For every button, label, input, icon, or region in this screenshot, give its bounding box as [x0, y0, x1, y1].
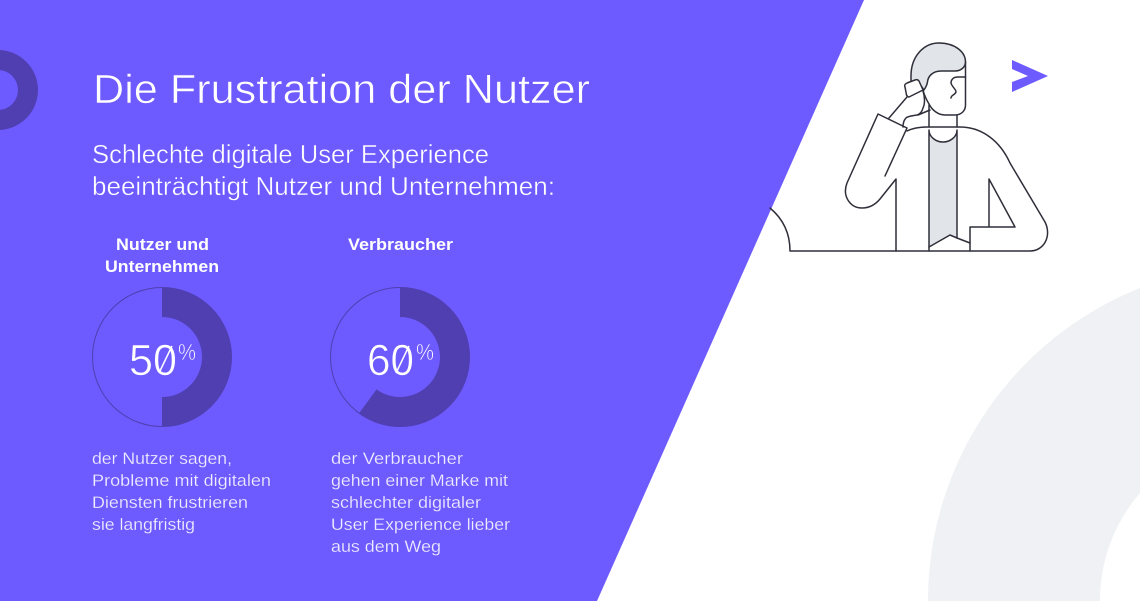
heading: Nutzer und Unternehmen: Nutzer und — [116, 235, 209, 254]
description: 60%: aus dem Weg — [331, 537, 441, 556]
subtitle: Schlechte digitale User Experience — [92, 139, 489, 169]
description: 60%: gehen einer Marke mit — [331, 471, 508, 490]
donut chart: 60% — [330, 288, 470, 426]
heading: Nutzer und Unternehmen: Unternehmen — [105, 257, 219, 276]
donut chart: 50%: 50 — [129, 336, 177, 385]
description: 60% — [331, 449, 510, 556]
face — [923, 62, 966, 115]
nose — [951, 77, 966, 98]
column: Nutzer und Unternehmen — [92, 235, 271, 534]
description: 60%: schlechter digitaler — [331, 493, 481, 512]
body outline — [770, 127, 1048, 251]
description: 50%: der Nutzer sagen, — [92, 449, 232, 468]
subtitle — [92, 139, 555, 201]
donut chart: 50%: % — [178, 339, 196, 365]
description: 50%: Probleme mit digitalen — [92, 471, 271, 490]
hair — [911, 43, 966, 90]
tie panel — [929, 130, 957, 247]
background arc: grey quarter ring — [928, 288, 1140, 601]
description: 60%: User Experience lieber — [331, 515, 510, 534]
purple angled panel — [0, 0, 864, 601]
illustration: thinking man — [770, 43, 1048, 251]
shirt lower lines — [929, 238, 970, 251]
icon: arrow logo — [1012, 60, 1048, 92]
title: Die Frustration der Nutzer — [93, 66, 590, 112]
heading: Nutzer und Unternehmen — [105, 235, 219, 276]
decorative ring at left edge — [0, 50, 38, 130]
description: 60%: der Verbraucher — [331, 449, 463, 468]
heading: Verbraucher: Verbraucher — [348, 235, 453, 254]
column: Verbraucher — [330, 235, 510, 556]
donut chart: 50% — [92, 288, 232, 426]
hand and phone — [905, 80, 923, 97]
subtitle: beeinträchtigt Nutzer und Unternehmen: — [92, 171, 555, 201]
donut chart: 60%: % — [416, 339, 434, 365]
description: 50% — [92, 449, 271, 534]
neck — [929, 105, 957, 127]
pocket — [970, 179, 1015, 251]
description: 50%: sie langfristig — [92, 515, 195, 534]
description: 50%: Diensten frustrieren — [92, 493, 248, 512]
donut chart: 60%: 60 — [367, 336, 414, 385]
sleeve and arm — [845, 114, 907, 251]
